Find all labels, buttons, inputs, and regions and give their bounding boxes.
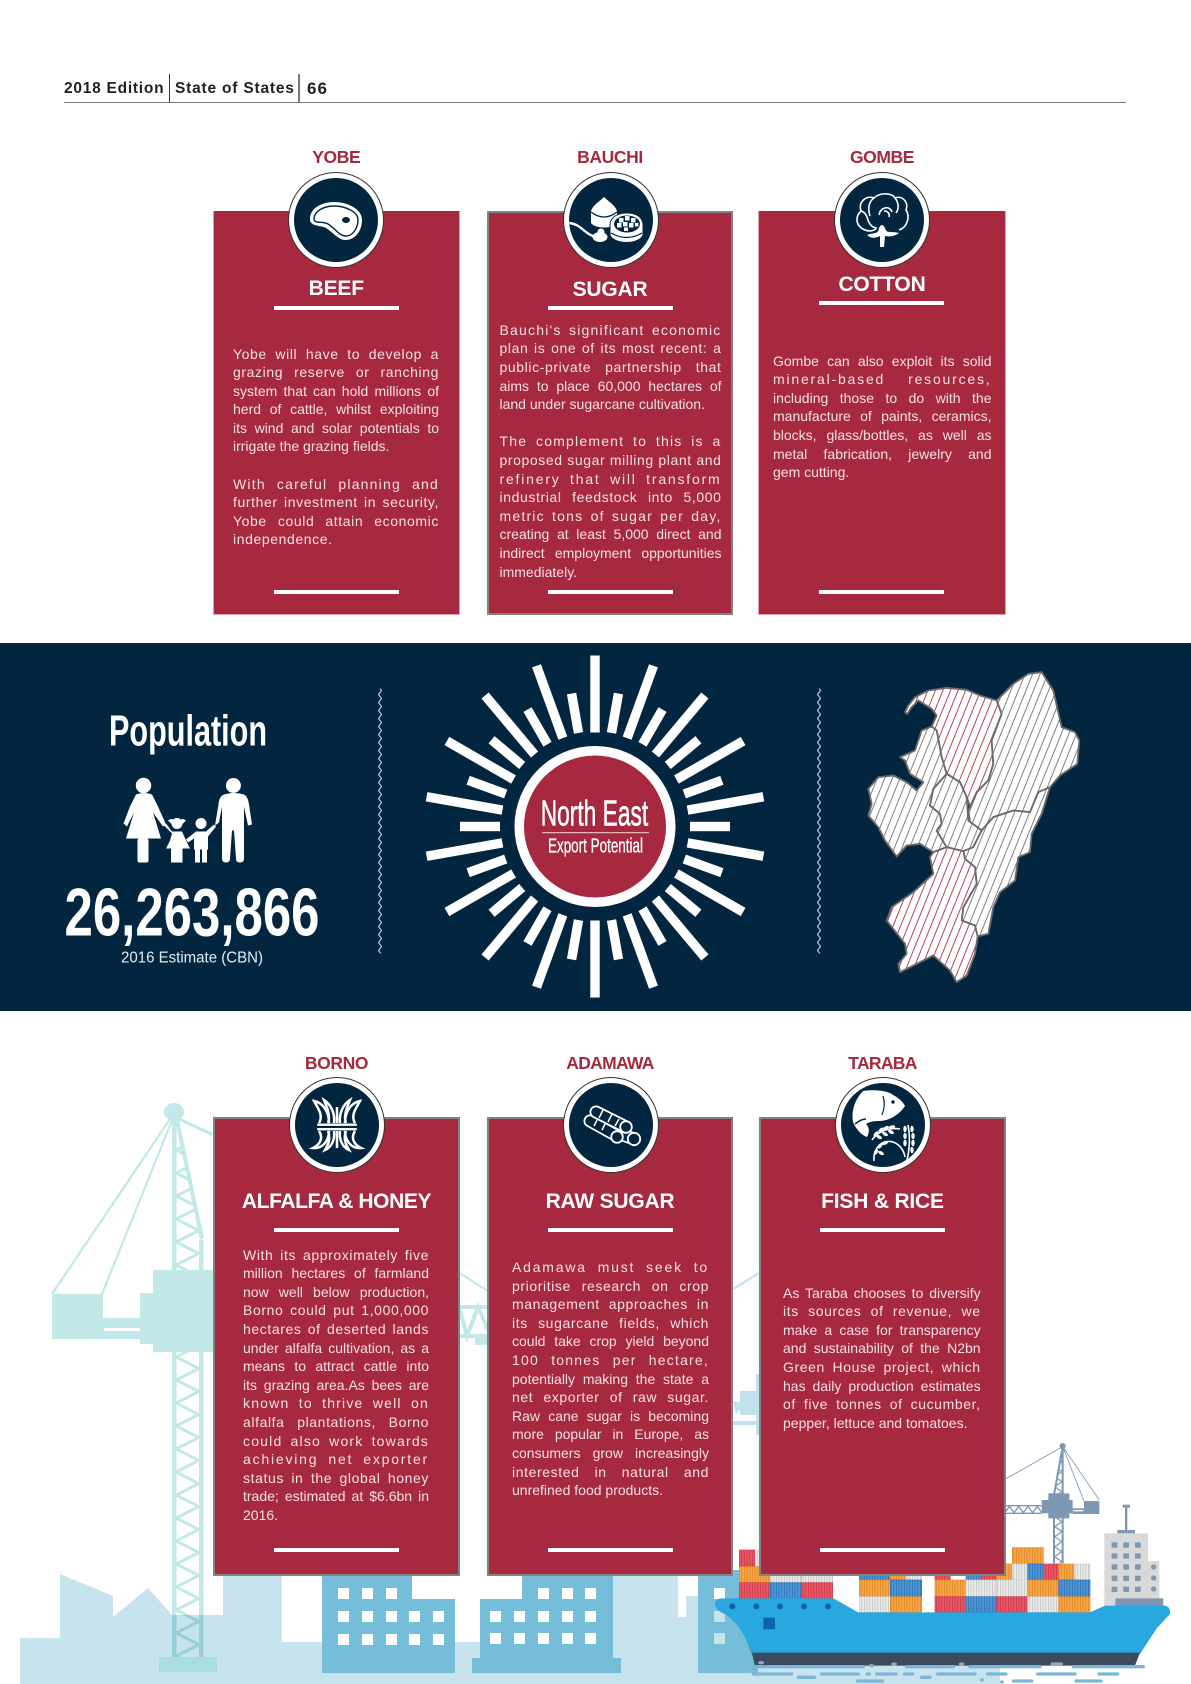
state name: BORNO	[305, 1053, 368, 1073]
containers	[739, 1548, 1090, 1612]
map of the North East states	[868, 672, 1079, 982]
body text: and sustainability of the N2bn	[783, 1340, 981, 1356]
body text: 2016.	[243, 1507, 278, 1523]
body text: industrial feedstock into 5,000	[500, 489, 722, 505]
body text: refinery that will transform	[500, 471, 722, 487]
header: edition, title and page number: 66	[307, 79, 328, 98]
panel: Taraba fish and rice	[759, 1053, 1006, 1576]
header: edition, title and page number: 2018 Edition	[64, 80, 164, 97]
state name: TARABA	[848, 1053, 917, 1073]
body text: With its approximately five	[243, 1247, 429, 1263]
body text: Borno could put 1,000,000	[243, 1302, 429, 1318]
state name: YOBE	[312, 147, 360, 167]
body text: alfalfa plantations, Borno	[243, 1414, 429, 1430]
icon: sugarcane stalks	[563, 1077, 659, 1173]
state name: GOMBE	[850, 147, 914, 167]
state name: ADAMAWA	[566, 1053, 654, 1073]
panel background	[758, 211, 1006, 615]
body text: indirect employment opportunities	[500, 545, 722, 561]
body text: now well below production,	[243, 1284, 429, 1300]
body text: public-private partnership that	[500, 359, 722, 375]
body text: make a case for transparency	[783, 1322, 981, 1338]
body text: creating at least 5,000 direct and	[500, 526, 722, 542]
body text: blocks, glass/bottles, as well as	[773, 427, 992, 443]
panel background	[212, 211, 460, 615]
bottom rule	[274, 1548, 399, 1552]
body text: herd of cattle, whilst exploiting	[233, 401, 439, 417]
panel: Bauchi sugar	[487, 147, 733, 615]
body text: system that can hold millions of	[233, 383, 439, 399]
body text: With careful planning and	[233, 476, 439, 492]
top rule	[548, 1228, 673, 1232]
body text	[243, 1247, 430, 1523]
header: edition, title and page number	[64, 74, 1126, 103]
panel background	[487, 1117, 733, 1576]
icon: family	[124, 777, 252, 862]
body text: management approaches in	[512, 1296, 709, 1312]
container ship	[715, 1443, 1170, 1682]
body text: achieving net exporter	[243, 1451, 429, 1467]
sunburst badge: North East Export Potential: Export Potential	[548, 835, 643, 857]
body text: under alfalfa cultivation, as a	[243, 1340, 429, 1356]
body text: more popular in Europe, as	[512, 1426, 709, 1442]
body text: further investment in security,	[233, 494, 439, 510]
product heading: FISH & RICE	[821, 1190, 944, 1213]
body text: independence.	[233, 531, 333, 547]
body text: its sugarcane fields, which	[512, 1315, 709, 1331]
icon: alfalfa sheaf	[289, 1077, 385, 1173]
population figure: 26,263,866	[64, 874, 320, 950]
body text: hectares of deserted lands	[243, 1321, 429, 1337]
body text: including those to do with the	[773, 390, 992, 406]
blue buildings	[322, 1570, 758, 1673]
body text: could also work towards	[243, 1433, 429, 1449]
body text: land under sugarcane cultivation.	[500, 396, 705, 412]
panel: Adamawa raw sugar	[487, 1053, 733, 1576]
body text: its sources of revenue, we	[783, 1303, 981, 1319]
body text: mineral-based resources,	[773, 371, 992, 387]
top rule	[820, 1228, 945, 1232]
body text: unrefined food products.	[512, 1482, 663, 1498]
panel: Borno alfalfa and honey	[213, 1053, 460, 1576]
body text: status in the global honey	[243, 1470, 429, 1486]
body text: grazing reserve or ranching	[233, 364, 439, 380]
icon: fish and rice	[835, 1077, 931, 1173]
body text	[773, 353, 992, 480]
ship bridge	[1104, 1505, 1163, 1608]
ship crane	[1005, 1443, 1099, 1563]
water dashes	[737, 1667, 1143, 1682]
body text: manufacture of paints, ceramics,	[773, 408, 992, 424]
product heading: ALFALFA & HONEY	[242, 1190, 431, 1213]
hull	[715, 1598, 1170, 1654]
bottom rule	[819, 590, 944, 594]
body text: aims to place 60,000 hectares of	[500, 378, 722, 394]
product heading: RAW SUGAR	[546, 1190, 674, 1213]
panel background	[213, 1117, 460, 1576]
bottom rule	[548, 590, 673, 594]
body text: prioritise research on crop	[512, 1278, 709, 1294]
bottom rule	[274, 590, 398, 594]
header: edition, title and page number: State of States	[175, 80, 295, 97]
population source note: 2016 Estimate (CBN)	[121, 949, 263, 966]
population band	[0, 643, 1191, 1011]
body text: immediately.	[500, 564, 577, 580]
body text: proposed sugar milling plant and	[500, 452, 722, 468]
body text: interested in natural and	[512, 1464, 709, 1480]
top rule	[274, 306, 398, 310]
body text: trade; estimated at $6.6bn in	[243, 1488, 429, 1504]
top rule	[274, 1228, 399, 1232]
body text: plan is one of its most recent: a	[500, 340, 722, 356]
body text: pepper, lettuce and tomatoes.	[783, 1415, 967, 1431]
top rule	[819, 301, 944, 305]
panel: Gombe cotton	[758, 147, 1006, 615]
body text: known to thrive well on	[243, 1395, 429, 1411]
body text: irrigate the grazing fields.	[233, 438, 389, 454]
body text: its wind and solar potentials to	[233, 420, 439, 436]
icon: cotton boll	[834, 172, 930, 268]
body text: gem cutting.	[773, 464, 849, 480]
body text: net exporter of raw sugar.	[512, 1389, 709, 1405]
body text: of five tonnes of cucumber,	[783, 1396, 981, 1412]
top rule	[548, 306, 673, 310]
body text	[512, 1259, 710, 1498]
body text: means to attract cattle into	[243, 1358, 429, 1374]
body text: million hectares of farmland	[243, 1265, 429, 1281]
sunburst badge: North East Export Potential	[426, 655, 764, 997]
icon: sugar bowls and spoon	[563, 172, 659, 268]
product heading: SUGAR	[573, 278, 647, 301]
tower crane left	[52, 1103, 759, 1658]
body text: Gombe can also exploit its solid	[773, 353, 992, 369]
body text: has daily production estimates	[783, 1378, 981, 1394]
body text: Yobe will have to develop a	[233, 346, 439, 362]
body text: metric tons of sugar per day,	[500, 508, 722, 524]
background scene: port with cranes, buildings and container ship	[20, 1103, 1170, 1684]
body text: Raw cane sugar is becoming	[512, 1408, 709, 1424]
body text: Adamawa must seek to	[512, 1259, 709, 1275]
bottom rule	[820, 1548, 945, 1552]
body text: Bauchi's significant economic	[500, 322, 722, 338]
body text: 100 tonnes per hectare,	[512, 1352, 709, 1368]
body text: its grazing area.As bees are	[243, 1377, 429, 1393]
body text	[783, 1285, 981, 1431]
state name: BAUCHI	[577, 147, 643, 167]
body text: potentially making the state a	[512, 1371, 709, 1387]
population heading: Population	[109, 706, 267, 755]
body text: Yobe could attain economic	[233, 513, 439, 529]
body text: metal fabrication, jewelry and	[773, 446, 992, 462]
body text	[233, 346, 440, 547]
body text: As Taraba chooses to diversify	[783, 1285, 981, 1301]
icon: beef steak	[288, 172, 384, 268]
product heading: BEEF	[309, 277, 364, 300]
panel background	[759, 1117, 1006, 1576]
panel background	[487, 211, 733, 615]
body text: could take crop yield beyond	[512, 1333, 709, 1349]
faint distant crane between cards	[733, 1374, 759, 1435]
product heading: COTTON	[838, 273, 926, 296]
light skyline	[20, 1570, 1000, 1684]
panel: Yobe beef	[213, 147, 460, 615]
body text: Green House project, which	[783, 1359, 981, 1375]
building windows	[338, 1588, 725, 1645]
body text	[500, 322, 722, 580]
body text: consumers grow increasingly	[512, 1445, 709, 1461]
sunburst badge: North East Export Potential: North East	[541, 792, 648, 833]
bottom rule	[548, 1548, 673, 1552]
body text: The complement to this is a	[500, 433, 722, 449]
